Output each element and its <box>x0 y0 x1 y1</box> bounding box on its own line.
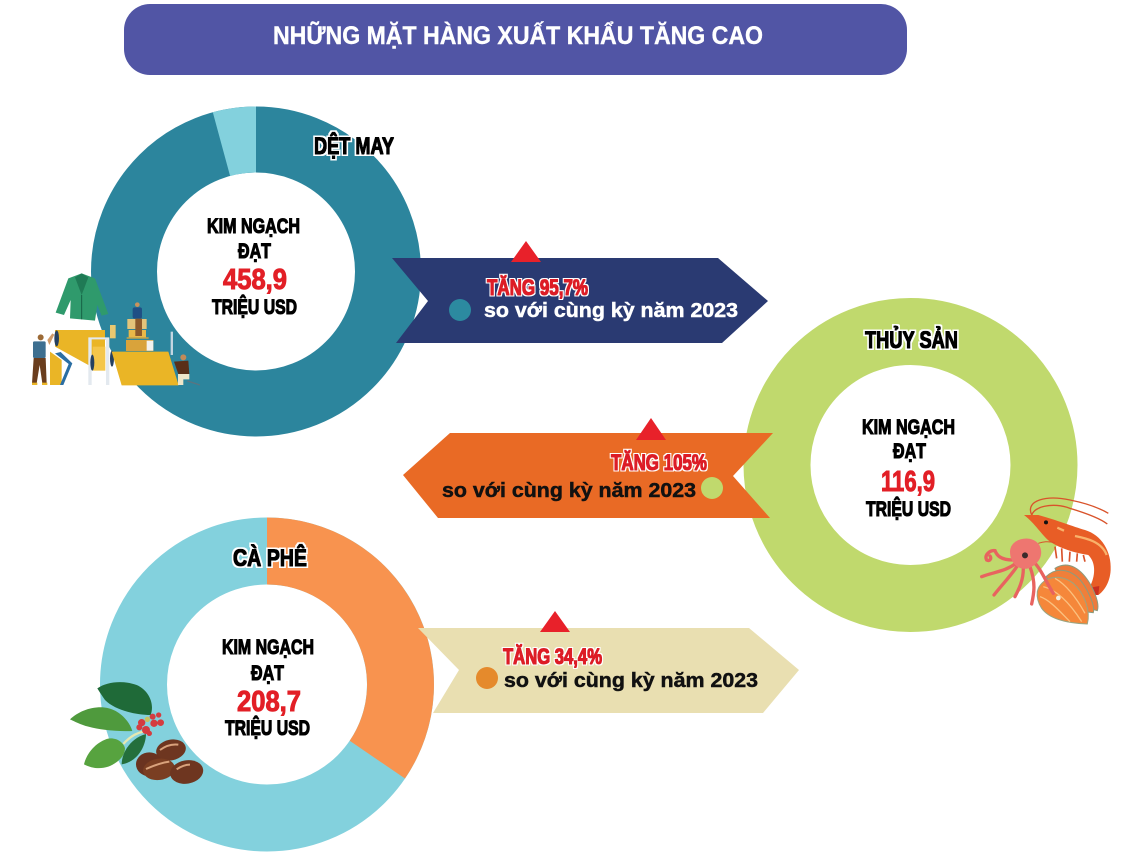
icon: coffee beans <box>136 737 205 786</box>
donut: seafood <box>777 325 1044 598</box>
value: textile: 458,9 <box>223 264 287 296</box>
icon: coffee leaves <box>70 682 152 768</box>
icon: jacket <box>56 273 108 321</box>
icon: coffee <box>70 682 205 786</box>
value: textile: KIM NGẠCH <box>207 215 300 238</box>
value: coffee: KIM NGẠCH <box>222 636 314 659</box>
value: seafood <box>862 416 955 521</box>
arrow: textile growth: TĂNG 95,7% <box>487 275 588 300</box>
label: textile: DỆT MAY <box>314 132 394 160</box>
icon: worker at tower <box>126 302 153 351</box>
value: seafood: KIM NGẠCH <box>862 416 955 439</box>
icon: seafood <box>982 498 1111 624</box>
arrow: textile growth: so với cùng kỳ năm 2023 <box>484 299 738 322</box>
icon: worker left <box>32 333 54 385</box>
icon: coffee berries <box>136 712 164 736</box>
arrow: seafood growth: TĂNG 105% <box>611 450 707 475</box>
arrow: coffee growth: so với cùng kỳ năm 2023 <box>504 669 758 692</box>
value: textile: ĐẠT <box>238 240 271 263</box>
icon: shrimp <box>1024 498 1111 595</box>
value: seafood: TRIỆU USD <box>866 497 951 521</box>
value: textile <box>207 215 300 319</box>
value: coffee: 208,7 <box>237 686 301 718</box>
icon: fabric machine <box>50 325 179 385</box>
arrow: textile growth <box>392 241 768 343</box>
arrow: seafood growth <box>403 418 773 518</box>
donut: textile <box>124 106 394 404</box>
icon: worker right <box>174 354 200 385</box>
icon: octopus <box>982 538 1055 604</box>
value: seafood: ĐẠT <box>893 440 926 463</box>
value: textile: TRIỆU USD <box>212 295 297 319</box>
value: coffee: ĐẠT <box>251 662 284 685</box>
icon: textile factory <box>32 273 200 385</box>
arrow: coffee growth: TĂNG 34,4% <box>503 644 602 669</box>
value: coffee <box>222 636 314 740</box>
value: coffee: TRIỆU USD <box>225 716 310 740</box>
icon: salmon steaks <box>1037 565 1098 624</box>
value: seafood: 116,9 <box>881 466 935 498</box>
title banner: NHỮNG MẶT HÀNG XUẤT KHẨU TĂNG CAO <box>273 20 763 50</box>
arrow: coffee growth <box>418 611 799 713</box>
label: coffee: CÀ PHÊ <box>233 544 307 572</box>
title banner <box>124 4 907 75</box>
donut: coffee <box>134 518 434 818</box>
label: seafood: THỦY SẢN <box>865 325 958 354</box>
arrow: seafood growth: so với cùng kỳ năm 2023 <box>442 479 696 502</box>
